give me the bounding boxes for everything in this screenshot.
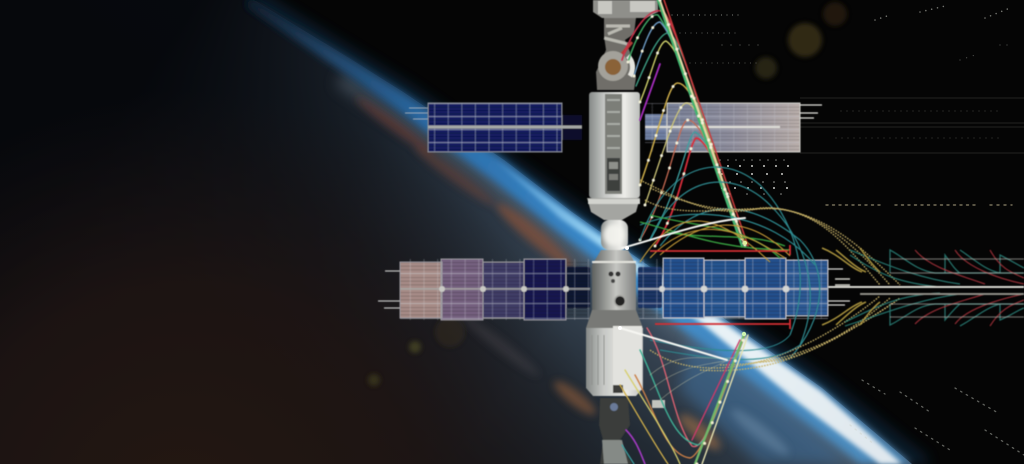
upper docking truss (596, 18, 636, 90)
lower right solar wing (638, 258, 850, 319)
upper data curves (622, 0, 748, 246)
neck (601, 220, 628, 250)
upper left solar wing (405, 103, 582, 152)
lens flares (368, 2, 847, 386)
docked vehicle (599, 398, 632, 464)
central node (592, 250, 636, 310)
faint data rows, upper right (672, 6, 1012, 205)
lower module (586, 328, 643, 396)
upper right solar wing (645, 103, 822, 152)
dot matrix behind panels (720, 160, 790, 194)
main module collar (587, 198, 640, 220)
top module (593, 0, 658, 18)
faint telemetry rules, upper right (800, 98, 1024, 153)
station core (586, 0, 665, 464)
earth limb glow (246, 0, 925, 464)
bottom right data dashes (850, 380, 1024, 455)
lower left solar wing (378, 259, 590, 320)
main module (589, 92, 640, 198)
lower data curves (620, 328, 748, 464)
right data stream (822, 248, 1024, 326)
white highlight beams (620, 218, 745, 360)
earth clouds and sunset tones (353, 94, 793, 460)
middle fan of curves (640, 167, 900, 371)
highlight nodes on curves (618, 241, 747, 336)
